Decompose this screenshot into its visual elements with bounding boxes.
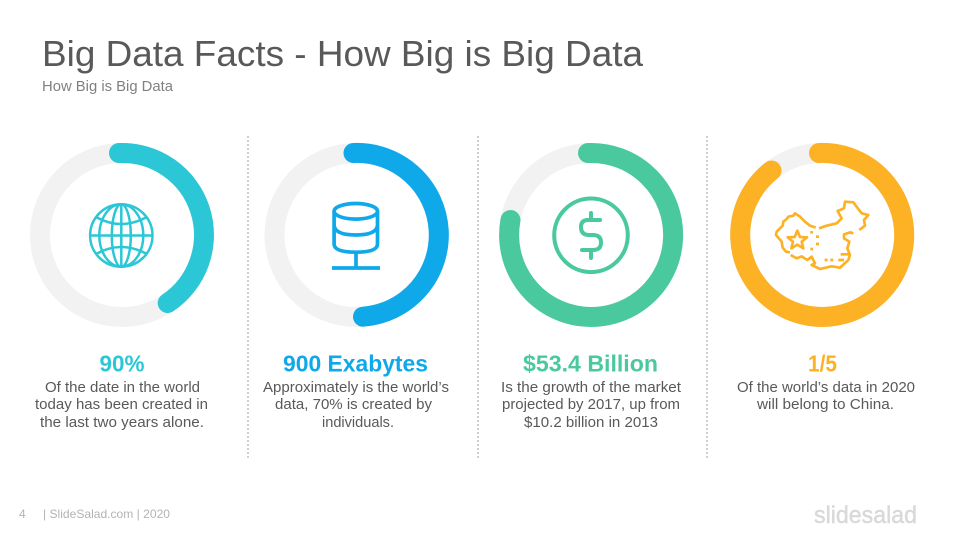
- logo: slidesalad: slidesalad: [814, 502, 917, 529]
- description: 900 Exabytes: [263, 379, 449, 431]
- description: 900 Exabytes: Approximately is the world’s: [263, 379, 449, 396]
- description: 1/5: will belong to China.: [756, 396, 894, 413]
- donut chart: 1/5: [740, 153, 904, 317]
- icon: database: [332, 204, 380, 268]
- donut chart: 90%: [40, 153, 204, 317]
- description: 1/5: [737, 379, 915, 413]
- description: 90%: [35, 379, 208, 431]
- description: $53.4 Billion: $10.2 billion in 2013: [524, 414, 658, 431]
- panel: $53.4 Billion: [501, 153, 682, 431]
- description: 900 Exabytes: data, 70% is created by: [275, 396, 432, 413]
- description: 90%: Of the date in the world: [45, 379, 200, 396]
- title: Big Data Facts - How Big is Big Data: [42, 33, 644, 74]
- description: $53.4 Billion: Is the growth of the market: [501, 379, 682, 396]
- icon: China map: [776, 202, 868, 269]
- panel: 1/5: [737, 153, 915, 413]
- description: 900 Exabytes: individuals.: [322, 414, 394, 431]
- donut chart: 900 Exabytes: [274, 153, 439, 317]
- footer text: | SlideSalad.com | 2020: [43, 507, 170, 521]
- description: $53.4 Billion: [501, 379, 682, 431]
- donut chart: $53.4 Billion: [509, 153, 673, 317]
- icon: globe: [90, 204, 153, 267]
- subtitle: How Big is Big Data: [42, 78, 174, 95]
- description: 90%: today has been created in: [35, 396, 208, 413]
- stat: 1/5: 1/5: [808, 350, 837, 376]
- description: 1/5: Of the world’s data in 2020: [737, 379, 915, 396]
- stat: 900 Exabytes: 900 Exabytes: [283, 350, 428, 376]
- icon: dollar coin: [554, 198, 628, 272]
- stat: $53.4 Billion: $53.4 Billion: [523, 350, 658, 376]
- panel: 900 Exabytes: [263, 153, 449, 431]
- panel: 90%: [35, 153, 208, 431]
- description: 90%: the last two years alone.: [40, 414, 204, 431]
- description: $53.4 Billion: projected by 2017, up from: [502, 396, 680, 413]
- page number: 4: [19, 507, 26, 521]
- stat: 90%: 90%: [100, 350, 145, 376]
